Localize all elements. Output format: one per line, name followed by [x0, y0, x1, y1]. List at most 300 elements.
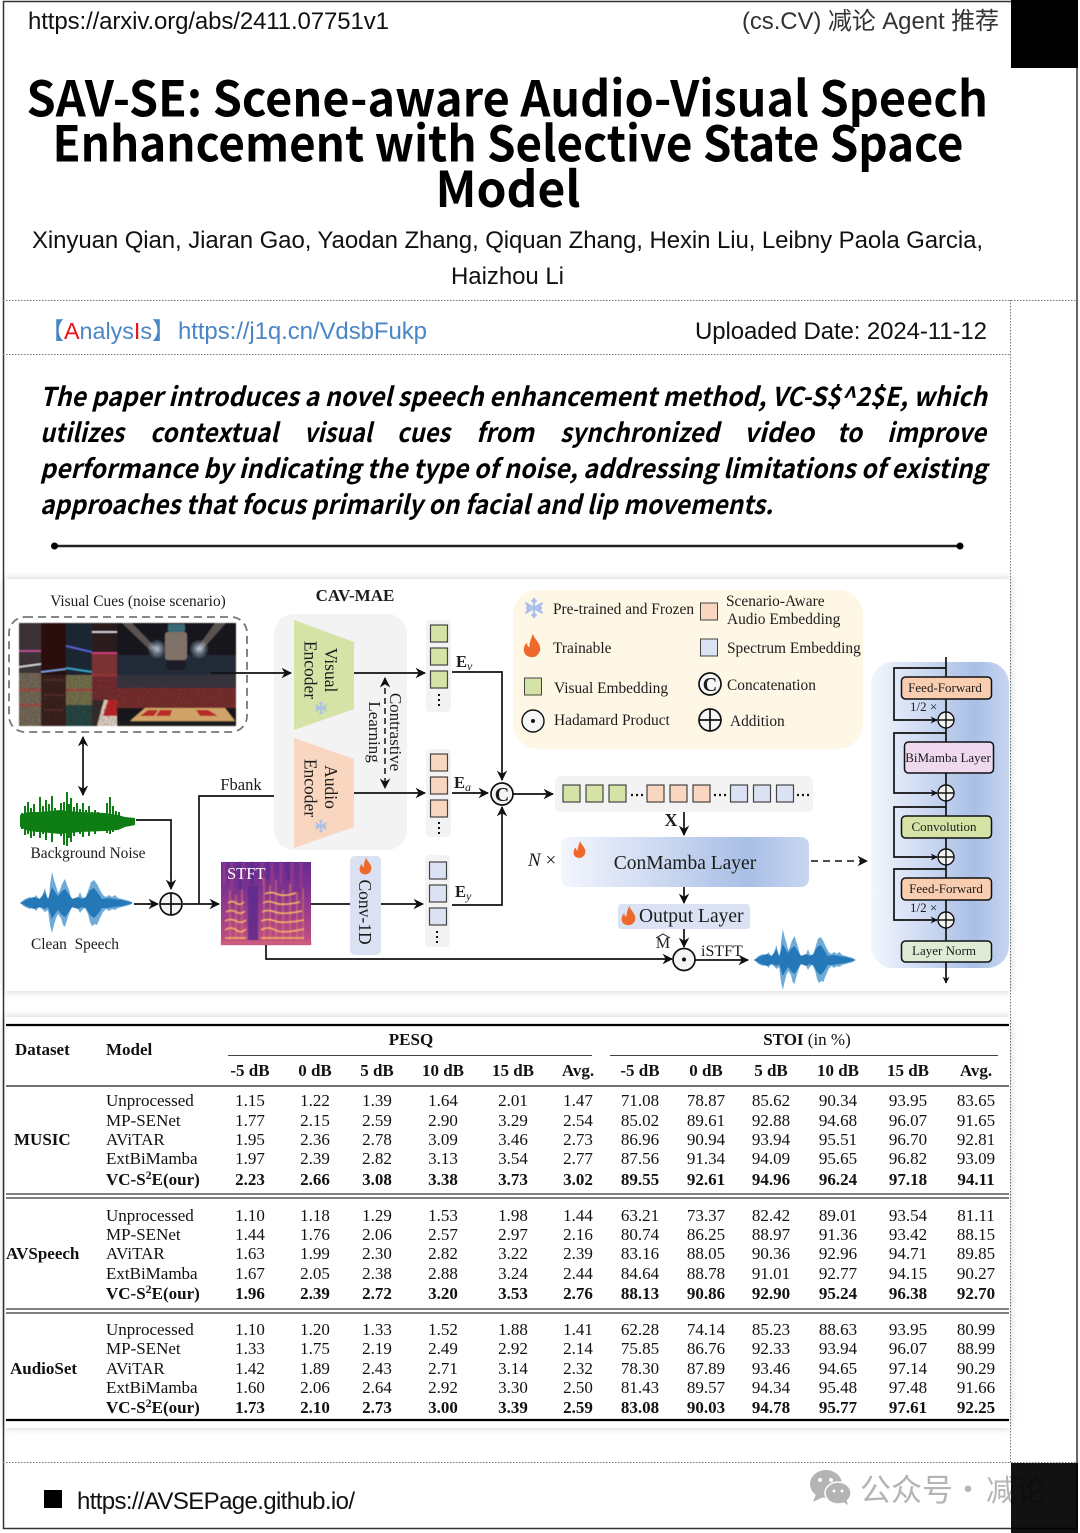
main signal path [945, 657, 947, 983]
table group: AVSpeech: 94.15 [889, 1264, 927, 1283]
table group: AVSpeech: 1.76 [300, 1225, 330, 1244]
legend: Concatenation [727, 677, 816, 694]
table group: AVSpeech: 92.70 [957, 1284, 995, 1303]
add node [938, 712, 954, 728]
table group: AudioSet: 3.30 [498, 1378, 528, 1397]
panel: architecture diagram [5, 579, 1010, 991]
table group: AudioSet: 83.08 [621, 1398, 659, 1417]
table group: AVSpeech: 96.38 [889, 1284, 927, 1303]
analysis link: 【AnalysIs】 [41, 318, 175, 344]
table group: AVSpeech: 1.44 [563, 1206, 593, 1225]
table group: AVSpeech: 93.54 [889, 1206, 928, 1225]
abstract: cues [397, 413, 453, 450]
table header: Dataset [15, 1040, 70, 1059]
add node [938, 785, 954, 801]
block: feed-forward: Feed-Forward [908, 680, 982, 695]
table group: MUSIC: 1.47 [563, 1091, 593, 1110]
table group: AudioSet: 89.57 [687, 1378, 726, 1397]
table group: AudioSet: AudioSet [10, 1359, 77, 1378]
abstract: performance by indicating the type of noise, addressing limitations of existing [40, 449, 990, 486]
arrow: audio encoder to embedding [354, 792, 425, 794]
label: Ev: E [456, 652, 467, 671]
table group: MUSIC: 3.29 [498, 1111, 528, 1130]
legend: Pre-trained and Frozen [553, 601, 694, 618]
arrow: ConMamba expansion [811, 860, 867, 862]
table group: AudioSet: 2.06 [300, 1378, 330, 1397]
authors: Xinyuan Qian, Jiaran Gao, Yaodan Zhang, Qiquan Zhang, Hexin Liu, Leibny Paola Garcia, [32, 227, 983, 254]
table group: MUSIC: 2.90 [428, 1111, 458, 1130]
table group: MUSIC: 95.51 [819, 1130, 857, 1149]
table group: MUSIC: 71.08 [621, 1091, 659, 1110]
table group: AudioSet: 92.25 [957, 1398, 995, 1417]
table group: AudioSet: 93.95 [889, 1320, 927, 1339]
label: clean speech: Clean Speech [31, 936, 119, 953]
abstract: video [744, 413, 817, 450]
table group: MUSIC: 2.78 [362, 1130, 392, 1149]
table group: MUSIC: E(our) [152, 1170, 200, 1189]
table group: MUSIC: 93.95 [889, 1091, 927, 1110]
legend: Addition [730, 713, 785, 730]
table group: AVSpeech: 93.42 [889, 1225, 927, 1244]
spectrogram [221, 862, 311, 945]
table group: AVSpeech: 95.24 [819, 1284, 858, 1303]
table group: AudioSet: 95.77 [819, 1398, 858, 1417]
block: feed-forward [902, 878, 992, 900]
arrow: hadamard to iSTFT [695, 959, 748, 961]
table group: AVSpeech: 73.37 [687, 1206, 726, 1225]
label: Ev: v [467, 659, 473, 673]
table group: MUSIC: 97.18 [889, 1170, 927, 1189]
table group: AudioSet: 1.33 [362, 1320, 392, 1339]
table group: AudioSet [10, 1320, 995, 1417]
table group: AVSpeech: ExtBiMamba [106, 1264, 198, 1283]
table group: AudioSet: MP-SENet [106, 1339, 181, 1358]
table group: MUSIC: 1.39 [362, 1091, 392, 1110]
table group: AVSpeech: 2.88 [428, 1264, 458, 1283]
table group: AudioSet: 91.66 [957, 1378, 995, 1397]
table group: AVSpeech: 2.39 [300, 1284, 330, 1303]
label: N times: N × [527, 850, 556, 871]
arrow: ConMamba to output [683, 887, 685, 903]
table group: AVSpeech: E(our) [152, 1284, 200, 1303]
concatenated sequence [555, 776, 813, 812]
table group: MUSIC: 1.22 [300, 1091, 330, 1110]
noise line to addition [136, 820, 171, 889]
abstract: The paper introduces a novel speech enhancement method, VC-S$^2$E, which [40, 377, 988, 414]
table header: PESQ [389, 1030, 433, 1049]
table group: AudioSet: 1.10 [235, 1320, 265, 1339]
table group: AVSpeech: 80.74 [621, 1225, 660, 1244]
title: Model [436, 151, 580, 222]
table group: AVSpeech: 84.64 [621, 1264, 660, 1283]
table group: AudioSet: 1.89 [300, 1359, 330, 1378]
add node [938, 849, 954, 865]
table group: AudioSet: 95.48 [819, 1378, 857, 1397]
table group: AudioSet: 2.49 [428, 1339, 458, 1358]
table group: MUSIC: 92.88 [752, 1111, 790, 1130]
table group: AVSpeech: 88.13 [621, 1284, 659, 1303]
table group: AVSpeech: 90.27 [957, 1264, 996, 1283]
table header: 5 dB [754, 1061, 788, 1080]
legend: C [703, 674, 717, 696]
table group: AudioSet: 1.52 [428, 1320, 458, 1339]
table group: AudioSet: 2.10 [300, 1398, 330, 1417]
table group: AVSpeech: 3.24 [498, 1264, 528, 1283]
label: Ey: E [455, 882, 466, 901]
table group: AudioSet: Unprocessed [106, 1320, 194, 1339]
table group: AVSpeech: 88.15 [957, 1225, 995, 1244]
table group: MUSIC: 90.34 [819, 1091, 858, 1110]
table group: AVSpeech: 2.30 [362, 1244, 392, 1263]
title: Enhancement with Selective State Space [52, 106, 964, 176]
table group: AudioSet: 86.76 [687, 1339, 725, 1358]
addition node [160, 893, 182, 915]
table group: AVSpeech: 2.44 [563, 1264, 593, 1283]
table group: MUSIC: 2.77 [563, 1149, 593, 1168]
contrastive learning: Learning [365, 701, 384, 763]
abstract: synchronized [560, 413, 722, 450]
table group: AVSpeech: 91.01 [752, 1264, 790, 1283]
table group: AudioSet: 1.41 [563, 1320, 593, 1339]
table group: MUSIC: 2.73 [563, 1130, 593, 1149]
table group: AVSpeech: 86.25 [687, 1225, 725, 1244]
table group: AVSpeech: 94.71 [889, 1244, 927, 1263]
arrow: STFT to Conv-1D [311, 903, 350, 905]
table group: AVSpeech: 88.05 [687, 1244, 725, 1263]
table group: MUSIC: 3.02 [563, 1170, 593, 1189]
arrow: image to visual encoder [211, 672, 291, 674]
table group: AVSpeech: 88.97 [752, 1225, 791, 1244]
table group: MUSIC: 83.65 [957, 1091, 995, 1110]
label: visual cues: Visual Cues (noise scenario) [50, 593, 226, 610]
line: Ey to concat [452, 807, 502, 905]
table group: MUSIC: 93.94 [752, 1130, 791, 1149]
table header: 0 dB [689, 1061, 723, 1080]
table header: Avg. [562, 1061, 594, 1080]
table header: -5 dB [620, 1061, 660, 1080]
table group: MUSIC: 90.94 [687, 1130, 726, 1149]
table header: 0 dB [298, 1061, 332, 1080]
table group: AVSpeech: 3.20 [428, 1284, 458, 1303]
label: background noise: Background Noise [31, 845, 146, 862]
output layer: Output Layer [639, 906, 744, 927]
footer bullet [44, 1490, 62, 1508]
table group: AudioSet: VC-S [106, 1398, 146, 1417]
table group: AudioSet: 88.63 [819, 1320, 857, 1339]
table group: AVSpeech: 1.29 [362, 1206, 392, 1225]
visual embeddings [426, 620, 451, 712]
table group: AudioSet: 90.29 [957, 1359, 995, 1378]
table group: AVSpeech: 90.86 [687, 1284, 725, 1303]
title [26, 60, 988, 222]
table group: AudioSet: 1.73 [235, 1398, 265, 1417]
table group: AudioSet: 85.23 [752, 1320, 790, 1339]
table group: AudioSet: 78.30 [621, 1359, 659, 1378]
table group: AudioSet: 2.64 [362, 1378, 392, 1397]
label: Ey: y [465, 889, 472, 903]
table group: AudioSet: 81.43 [621, 1378, 659, 1397]
arrow: visual cues to noise [82, 737, 84, 795]
arrow: sequence to ConMamba [683, 812, 685, 835]
table group: AudioSet: 2.19 [362, 1339, 392, 1358]
line: Ev to concat [452, 672, 502, 780]
watermark: · [952, 1465, 984, 1510]
table group: MUSIC: 3.13 [428, 1149, 458, 1168]
concat node [491, 783, 513, 806]
label: X: X [664, 810, 678, 830]
table group: AVSpeech: AViTAR [106, 1244, 165, 1263]
Conv-1D block [350, 856, 381, 955]
table group: AVSpeech: 2.57 [428, 1225, 458, 1244]
table group: MUSIC: 96.70 [889, 1130, 927, 1149]
table group: AudioSet: 94.78 [752, 1398, 790, 1417]
table group: MUSIC: 3.46 [498, 1130, 528, 1149]
table group: AudioSet: 94.34 [752, 1378, 791, 1397]
table header: STOI (in %) [763, 1030, 851, 1049]
table group: AudioSet: 2.73 [362, 1398, 392, 1417]
table group: AudioSet: 2.43 [362, 1359, 392, 1378]
source link: https://arxiv.org/abs/2411.07751v1 [28, 8, 389, 35]
skip connections [894, 668, 946, 920]
table group: MUSIC: MP-SENet [106, 1111, 181, 1130]
table group: AudioSet: 93.94 [819, 1339, 858, 1358]
table group: MUSIC: 94.68 [819, 1111, 857, 1130]
upload date: Uploaded Date: 2024-11-12 [695, 318, 987, 345]
table group: AVSpeech: 90.36 [752, 1244, 790, 1263]
legend: Spectrum Embedding [727, 640, 861, 657]
table group: MUSIC: Unprocessed [106, 1091, 194, 1110]
legend: Scenario-Aware [726, 593, 825, 610]
table group: AVSpeech: 1.96 [235, 1284, 265, 1303]
table group: MUSIC: 2.23 [235, 1170, 265, 1189]
table group: AVSpeech: 2.76 [563, 1284, 593, 1303]
watermark: 减论 [986, 1466, 1046, 1510]
table group: MUSIC: 89.61 [687, 1111, 725, 1130]
table group: MUSIC: 3.38 [428, 1170, 458, 1189]
table group: MUSIC: 91.34 [687, 1149, 726, 1168]
block: BiMamba: BiMamba Layer [905, 750, 991, 765]
table group: AudioSet: 1.42 [235, 1359, 265, 1378]
waveform: clean speech [20, 872, 133, 933]
table group: MUSIC: 2.59 [362, 1111, 392, 1130]
table header: 5 dB [360, 1061, 394, 1080]
table header: 15 dB [492, 1061, 534, 1080]
abstract: visual [304, 413, 375, 450]
label: fbank: Fbank [220, 775, 262, 794]
concat node: C [495, 784, 509, 806]
abstract: from [476, 413, 536, 450]
table group: MUSIC: 3.08 [362, 1170, 392, 1189]
table group: AVSpeech: 88.78 [687, 1264, 725, 1283]
table group: AVSpeech: 1.53 [428, 1206, 458, 1225]
table group: AudioSet: 88.99 [957, 1339, 995, 1358]
table group: MUSIC: 3.09 [428, 1130, 458, 1149]
table group: MUSIC: 93.09 [957, 1149, 995, 1168]
corner block: bottom right [1011, 1463, 1078, 1533]
table group: AVSpeech: 3.22 [498, 1244, 528, 1263]
table group: MUSIC: 1.15 [235, 1091, 265, 1110]
table group: AudioSet: 2 [146, 1396, 152, 1410]
table group: AVSpeech: 1.63 [235, 1244, 265, 1263]
table group: AVSpeech: 1.98 [498, 1206, 528, 1225]
table group: AudioSet: 3.00 [428, 1398, 458, 1417]
block: feed-forward: Feed-Forward [909, 881, 983, 896]
panel: ConMamba detail [871, 657, 1009, 983]
table group: MUSIC: 91.65 [957, 1111, 995, 1130]
table group: AudioSet: 3.39 [498, 1398, 528, 1417]
visual encoder: Encoder [300, 641, 320, 699]
table group: AVSpeech: 92.96 [819, 1244, 857, 1263]
watermark [810, 1465, 1046, 1510]
contrastive learning: Contrastive [386, 693, 405, 771]
label: Ea: E [454, 773, 465, 792]
table group: MUSIC: 86.96 [621, 1130, 659, 1149]
table group: AVSpeech: VC-S [106, 1284, 146, 1303]
table group: AVSpeech: 2.97 [498, 1225, 528, 1244]
label: iSTFT: iSTFT [701, 943, 743, 960]
abstract: utilizes [40, 413, 127, 450]
table group: AudioSet: 2.14 [563, 1339, 593, 1358]
table group: AVSpeech: 2.72 [362, 1284, 392, 1303]
table group: AVSpeech: 1.18 [300, 1206, 330, 1225]
arrow: visual encoder to embedding [354, 672, 425, 674]
table group: AVSpeech: 3.53 [498, 1284, 528, 1303]
abstract: to [837, 413, 865, 450]
hadamard node [673, 948, 695, 970]
table group: AVSpeech: 1.99 [300, 1244, 330, 1263]
block: feed-forward [902, 677, 992, 699]
waveform: background noise [20, 792, 135, 846]
table group: AVSpeech: 92.77 [819, 1264, 858, 1283]
table group: MUSIC: 92.81 [957, 1130, 995, 1149]
table header: 10 dB [817, 1061, 859, 1080]
table group: MUSIC: 85.62 [752, 1091, 790, 1110]
panel: results table [5, 1017, 1010, 1428]
add node [938, 912, 954, 928]
table header [15, 1030, 992, 1080]
legend: Hadamard Product [554, 712, 671, 729]
label: Ea: a [465, 780, 471, 794]
legend: Audio Embedding [727, 611, 841, 628]
table group: AudioSet: 87.89 [687, 1359, 725, 1378]
table group: AudioSet: 1.75 [300, 1339, 330, 1358]
category tag: (cs.CV) 减论 Agent 推荐 [742, 8, 999, 35]
table group: AudioSet: 2.59 [563, 1398, 593, 1417]
table group: AVSpeech: 1.67 [235, 1264, 265, 1283]
table group: AudioSet: ExtBiMamba [106, 1378, 198, 1397]
table group: AudioSet: 94.65 [819, 1359, 857, 1378]
visual encoder [294, 620, 354, 730]
table group: AudioSet: 2.50 [563, 1378, 593, 1397]
table group: MUSIC: 2.39 [300, 1149, 330, 1168]
table group: AudioSet: 1.88 [498, 1320, 528, 1339]
icon: wechat [810, 1470, 851, 1505]
table group: AVSpeech: 2.05 [300, 1264, 330, 1283]
table group: MUSIC: 1.77 [235, 1111, 265, 1130]
table group: AVSpeech: 2.38 [362, 1264, 392, 1283]
ConMamba block [561, 837, 809, 887]
abstract [40, 377, 990, 522]
audio encoder: Encoder [300, 759, 320, 817]
abstract: approaches that focus primarily on facial and lip movements. [40, 485, 773, 522]
table group: AudioSet: 2.71 [428, 1359, 458, 1378]
table group: MUSIC: 2.54 [563, 1111, 593, 1130]
block: convolution: Convolution [911, 819, 977, 834]
table group: AVSpeech: 2.39 [563, 1244, 593, 1263]
table group: AVSpeech: MP-SENet [106, 1225, 181, 1244]
table group: AVSpeech: 1.10 [235, 1206, 265, 1225]
table header: 10 dB [422, 1061, 464, 1080]
table group: AudioSet: 74.14 [687, 1320, 726, 1339]
table group: AVSpeech [6, 1206, 996, 1303]
arrow: fbank branch [199, 796, 291, 904]
table group: MUSIC: 94.09 [752, 1149, 790, 1168]
arrow: concat to sequence [513, 793, 553, 795]
watermark: 公众号 [860, 1465, 953, 1510]
table header: Model [106, 1040, 153, 1059]
table group: MUSIC: VC-S [106, 1170, 146, 1189]
line: Ea to concat [452, 792, 488, 794]
table group: AVSpeech: AVSpeech [6, 1244, 80, 1263]
analysis link [41, 318, 427, 345]
table group: MUSIC: 2.66 [300, 1170, 330, 1189]
heading: CAV-MAE: CAV-MAE [316, 586, 394, 605]
contrastive learning [365, 678, 405, 788]
table group: MUSIC: 85.02 [621, 1111, 659, 1130]
audio embeddings [426, 749, 451, 837]
footer link: https://AVSEPage.github.io/ [77, 1488, 355, 1515]
table group: AVSpeech: 63.21 [621, 1206, 659, 1225]
table group: MUSIC: 89.55 [621, 1170, 659, 1189]
table group: MUSIC: ExtBiMamba [106, 1149, 198, 1168]
label: half factor: 1/2 × [910, 900, 937, 915]
table group: AudioSet: 3.14 [498, 1359, 528, 1378]
table group: AudioSet: E(our) [152, 1398, 200, 1417]
table group: MUSIC: 96.07 [889, 1111, 928, 1130]
table group: AudioSet: 1.33 [235, 1339, 265, 1358]
line: STFT skip to hadamard [266, 945, 672, 959]
spectrum embeddings [425, 855, 450, 947]
table group: AudioSet: 96.07 [889, 1339, 928, 1358]
image: stadium scene collage [9, 617, 247, 732]
table group: MUSIC: 92.61 [687, 1170, 725, 1189]
authors [32, 227, 983, 290]
table group: AudioSet: 62.28 [621, 1320, 659, 1339]
arrow: Conv-1D to embedding [381, 903, 423, 905]
table group: AVSpeech: 1.44 [235, 1225, 265, 1244]
output layer [618, 904, 750, 929]
label: half factor: 1/2 × [910, 699, 937, 714]
table group: AudioSet: 92.33 [752, 1339, 790, 1358]
table group: MUSIC: 1.97 [235, 1149, 265, 1168]
table group: MUSIC: 96.82 [889, 1149, 927, 1168]
table group: AudioSet: 97.48 [889, 1378, 927, 1397]
arrow: addition to STFT [183, 903, 219, 905]
table group: AVSpeech: 92.90 [752, 1284, 790, 1303]
table group: AudioSet: 97.61 [889, 1398, 927, 1417]
table group: MUSIC: 87.56 [621, 1149, 659, 1168]
table group: MUSIC [14, 1091, 995, 1189]
table header: -5 dB [230, 1061, 270, 1080]
table group: MUSIC: 1.95 [235, 1130, 265, 1149]
waveform: enhanced speech [754, 929, 856, 990]
table group: MUSIC: 2.82 [362, 1149, 392, 1168]
corner block: top right [1011, 0, 1078, 68]
table group: AVSpeech: 89.01 [819, 1206, 857, 1225]
table group: MUSIC: 78.87 [687, 1091, 726, 1110]
block: layer norm: Layer Norm [912, 943, 976, 958]
ConMamba block: ConMamba Layer [614, 853, 757, 874]
